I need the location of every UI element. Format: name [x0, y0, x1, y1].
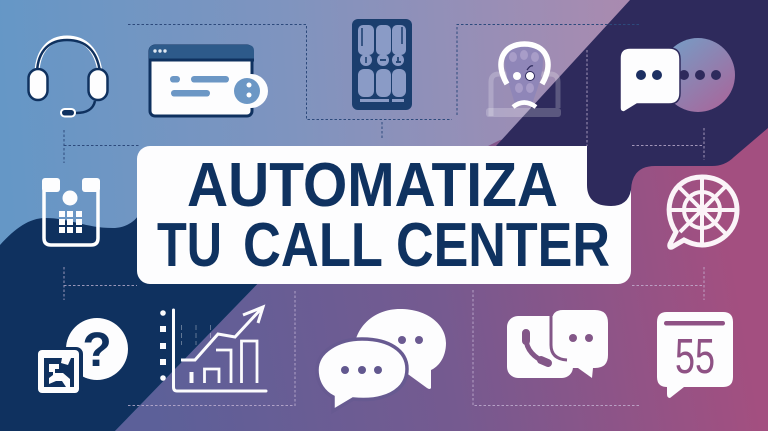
dashed connectors, on dark and lower areas: [64, 50, 704, 406]
icon: phone keypad: [352, 19, 412, 110]
icon: two speech bubbles: [317, 309, 446, 411]
background: navy wave shape: [0, 213, 300, 431]
dashed connectors, upper: [64, 24, 639, 163]
icon: globe wheel chat: [668, 177, 737, 247]
icon: avatar on laptop: [486, 44, 561, 117]
icon: question and puzzle: ?: [82, 324, 112, 377]
icon: calendar with keypad: [42, 178, 100, 245]
title text: [157, 150, 610, 280]
title line 2: CALL: [243, 210, 382, 280]
title line 1: AUTOMATIZA: [187, 150, 558, 220]
icon: growth chart: [160, 307, 266, 391]
icon: phone and chat: [507, 310, 608, 378]
background: purple to magenta lower area: [115, 100, 768, 431]
title card: [137, 146, 631, 284]
number 55: 55: [675, 330, 715, 384]
icon: headset: [28, 38, 108, 116]
background: dark purple shape: [496, 0, 768, 206]
icon: browser window with chat: [149, 45, 268, 116]
icon: chat bubble over circle: [620, 38, 735, 112]
icon: calendar bubble with number: [657, 312, 733, 398]
icon: question and puzzle: [35, 318, 128, 396]
title line 2: TU: [157, 210, 222, 280]
title line 2: CENTER: [396, 210, 610, 280]
